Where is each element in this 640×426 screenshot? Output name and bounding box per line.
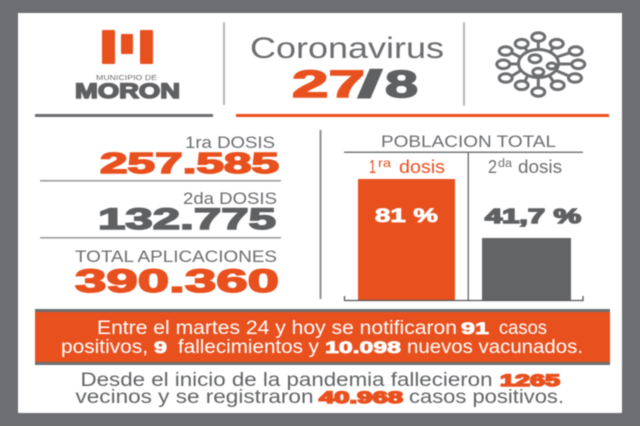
- bar: 1ra dosis 81%: [358, 179, 455, 300]
- bar label: 2da dosis: [488, 157, 562, 177]
- callout: weekly summary: 9: [154, 338, 167, 357]
- date: 27/8: 27: [292, 64, 365, 106]
- text block: pandemic totals: vecinos y se registraron: [76, 387, 314, 408]
- date: 27/8: [292, 64, 418, 106]
- bar label: 2da dosis: 2: [488, 157, 497, 177]
- chart heading: POBLACION TOTAL: [381, 133, 556, 151]
- bar label: 1ra dosis: dosis: [399, 157, 445, 177]
- bar label: 1ra dosis: 1: [369, 157, 376, 177]
- text block: pandemic totals: 40.968: [319, 388, 403, 407]
- divider lines: header rules: [35, 114, 609, 117]
- callout: weekly summary: 10.098: [325, 338, 401, 357]
- stat: total aplicaciones: [75, 247, 279, 299]
- bar label: 2da dosis: dosis: [518, 157, 562, 177]
- axis: [344, 296, 583, 300]
- logo: Municipio de Moron: MORON: [75, 80, 180, 103]
- bar chart: poblacion total: [344, 133, 583, 300]
- callout: weekly summary: [35, 309, 610, 365]
- value: 81%: 81 %: [375, 206, 438, 227]
- date: 27/8: 8: [385, 64, 418, 106]
- callout: weekly summary: casos: [499, 318, 547, 339]
- icon: virus: [497, 33, 585, 96]
- callout: weekly summary: Entre el martes 24 y hoy se notificaron: [97, 318, 457, 339]
- logo: Municipio de Moron: [75, 30, 180, 103]
- bar label: 1ra dosis: [369, 157, 445, 177]
- bar: 2da dosis 41,7%: [482, 238, 571, 300]
- stat: total aplicaciones: TOTAL APLICACIONES: [75, 247, 277, 266]
- stat: 1ra dosis: 257.585: [100, 148, 279, 180]
- logo: Municipio de Moron: MUNICIPIO DE: [96, 73, 157, 82]
- stat: 1ra dosis: 1ra DOSIS: [185, 133, 275, 152]
- text block: pandemic totals: 1265: [500, 371, 560, 390]
- callout: weekly summary: positivos,: [61, 337, 148, 358]
- text block: pandemic totals: [76, 370, 564, 408]
- bar label: 2da dosis: da: [498, 158, 513, 170]
- stat: 2da dosis: 2da DOSIS: [183, 189, 277, 208]
- title: Coronavirus: Coronavirus: [250, 32, 444, 65]
- text block: pandemic totals: casos positivos.: [409, 387, 564, 408]
- callout: weekly summary: nuevos vacunados.: [407, 337, 583, 358]
- stat: 1ra dosis: [100, 133, 279, 180]
- callout: weekly summary: fallecimientos y: [178, 337, 320, 358]
- callout: weekly summary: 91: [461, 319, 489, 338]
- bar label: 1ra dosis: ra: [378, 158, 392, 170]
- stat: total aplicaciones: 390.360: [75, 263, 279, 299]
- stat: 2da dosis: [98, 189, 277, 236]
- stat: 2da dosis: 132.775: [98, 203, 276, 236]
- date: 27/8: /: [358, 64, 383, 106]
- value: 41,7%: 41,7 %: [485, 206, 581, 228]
- text block: pandemic totals: Desde el inicio de la pandemia fallecieron: [80, 370, 492, 391]
